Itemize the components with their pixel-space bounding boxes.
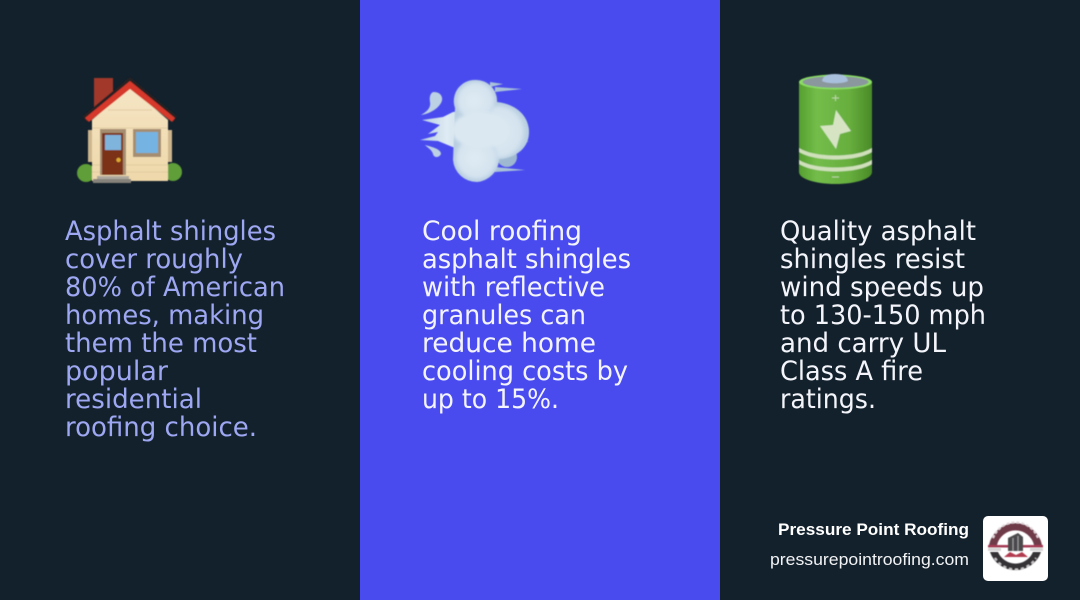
text block: right fact: to 130-150 mph [780,300,986,331]
text block: centre fact: reduce home [422,328,596,359]
text block: centre fact: Cool roofing [422,216,582,247]
text block: left fact: 80% of American [65,272,285,303]
text block: right fact: Quality asphalt [780,216,976,247]
icon: battery [799,74,872,184]
text block: centre fact: up to 15%. [422,384,559,415]
icon: wind cloud [420,80,529,182]
text block: centre fact: cooling costs by [422,356,628,387]
text block: left fact [65,216,285,443]
icon: house [77,77,182,183]
text block: left fact: homes, making [65,300,264,331]
text block: left fact: cover roughly [65,244,243,275]
text block: left fact: popular [65,356,169,387]
panel: right background [720,0,1080,600]
text block: centre fact: granules can [422,300,586,331]
text block: left fact: Asphalt shingles [65,216,276,247]
text block: right fact: and carry UL [780,328,946,359]
text block: right fact [780,216,986,415]
text block: left fact: them the most [65,328,257,359]
text block: left fact: roofing choice. [65,412,257,443]
panel: left background [0,0,360,600]
text block: right fact: ratings. [780,384,876,415]
text block: centre fact [422,216,631,415]
text block: centre fact: asphalt shingles [422,244,631,275]
website url: pressurepointroofing.com [770,550,969,569]
logo badge [983,516,1048,581]
text block: left fact: residential [65,384,202,415]
text block: right fact: Class A fire [780,356,923,387]
text block: right fact: wind speeds up [780,272,984,303]
brand name: Pressure Point Roofing [778,520,969,539]
text block: right fact: shingles resist [780,244,965,275]
text block: centre fact: with reflective [422,272,605,303]
panel: centre background [360,0,720,600]
